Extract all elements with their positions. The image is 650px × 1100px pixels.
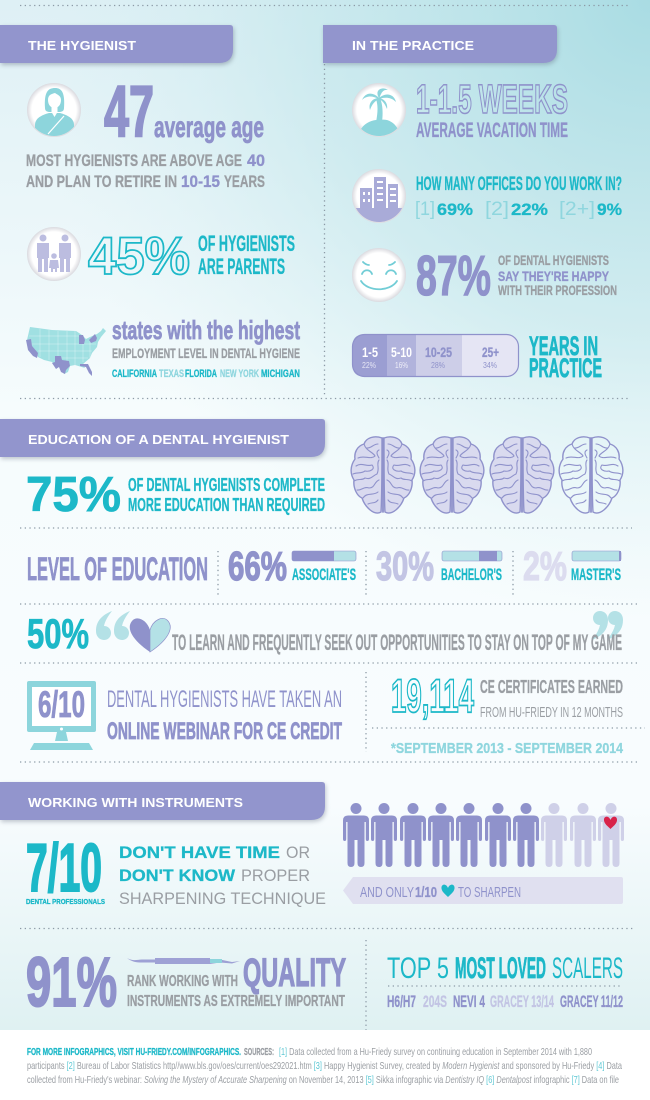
- panel: the hygienist: [0, 25, 300, 380]
- text: states with the highest employment: NEW YORK: [220, 368, 259, 380]
- chart: years in practice: 5-10: [391, 344, 412, 360]
- text: states with the highest employment: FLORIDA: [185, 368, 217, 380]
- stat: 91 percent: 91%: [26, 943, 117, 1021]
- stat: associate's 66 percent: ASSOCIATE'S: [292, 565, 356, 584]
- panel: education of a dental hygienist: [0, 419, 624, 757]
- stat: bachelor's 30 percent: [376, 543, 502, 589]
- stat: 45 percent are parents: ARE PARENTS: [198, 254, 285, 279]
- stat: 87 percent happy: [416, 244, 617, 308]
- icon: opening quotes: [96, 611, 130, 640]
- list: scalers: NEVI 4: [453, 992, 485, 1011]
- stat: 75 percent: [26, 468, 325, 522]
- text: retirement plans: 40: [247, 152, 265, 170]
- stat: CE certificates: 19,114: [391, 669, 474, 722]
- stat: 45 percent are parents: OF HYGIENISTS: [198, 231, 295, 256]
- callout: only 1/10 love to sharpen: AND ONLY: [360, 884, 414, 901]
- heading: education: [0, 419, 325, 457]
- stat: how many offices: [415, 174, 622, 220]
- list: scalers: [387, 992, 623, 1011]
- icon: hygienist portrait: [27, 83, 81, 140]
- quote: 50 percent love to learn: [27, 610, 623, 657]
- footer: sources: [27, 1046, 622, 1086]
- text: states with the highest employment: [112, 315, 300, 380]
- stat: vacation time: [416, 76, 568, 142]
- chart: years in practice: [352, 334, 518, 376]
- stat: bachelor's 30 percent: 30%: [376, 543, 434, 589]
- text: states with the highest employment: EMPLOYMENT LEVEL IN DENTAL HYGIENE: [112, 346, 300, 361]
- stat: associate's 66 percent: 66%: [228, 543, 287, 589]
- icon: computer monitor with 6/10: [27, 681, 96, 750]
- text: online webinar: [107, 686, 342, 745]
- stat: 7/10 dental professionals: [26, 830, 105, 906]
- stat: 7/10 dental professionals: DENTAL PROFESSIONALS: [26, 897, 105, 906]
- text: quality instruments: INSTRUMENTS AS EXTREMELY IMPORTANT: [127, 993, 345, 1010]
- text: online webinar: DENTAL HYGIENISTS HAVE TAKEN AN: [107, 686, 342, 713]
- callout: only 1/10 love to sharpen: 1/10: [415, 884, 437, 901]
- chart: years in practice: 28%: [431, 361, 445, 370]
- stat: how many offices: 22%: [511, 200, 548, 219]
- footer: sources: SOURCES:: [244, 1046, 274, 1058]
- icon: family: [27, 227, 81, 281]
- stat: 45 percent are parents: 45%: [88, 227, 190, 286]
- text: retirement plans: AND PLAN TO RETIRE IN: [26, 173, 177, 191]
- text: sharpening technique: DON'T KNOW: [119, 866, 236, 885]
- text: sharpening technique: SHARPENING TECHNIQUE: [119, 889, 326, 908]
- stat: master's 2 percent: 2%: [523, 543, 567, 589]
- stat: how many offices: 9%: [597, 200, 622, 219]
- text: sharpening technique: [119, 843, 326, 908]
- list: scalers: H6/H7: [387, 992, 416, 1011]
- chart: years in practice: 10-25: [425, 344, 452, 360]
- stat: how many offices: [1]: [415, 199, 435, 220]
- map: United States: [26, 327, 106, 376]
- stat: 47 average age: [104, 72, 264, 152]
- stat: 87 percent happy: SAY THEY'RE HAPPY: [498, 269, 609, 284]
- text: quality instruments: RANK WORKING WITH: [127, 973, 238, 990]
- chart: years in practice: 34%: [483, 361, 497, 370]
- heading: in the practice: [323, 25, 557, 63]
- stat: how many offices: [2+]: [559, 199, 595, 220]
- heading: top 5 most loved scalers: TOP 5: [387, 952, 449, 985]
- stat: how many offices: [2]: [485, 199, 509, 220]
- heading: in the practice: IN THE PRACTICE: [352, 38, 474, 53]
- list: scalers: 204S: [423, 992, 447, 1011]
- heading: working with instruments: WORKING WITH INSTRUMENTS: [28, 795, 243, 810]
- heading: top 5 most loved scalers: MOST LOVED: [455, 952, 546, 985]
- text: sharpening technique: OR: [286, 843, 310, 862]
- stat: 87 percent happy: 87%: [416, 244, 491, 308]
- text: states with the highest employment: states with the highest: [112, 315, 300, 345]
- text: sharpening technique: DON'T HAVE TIME: [119, 843, 280, 862]
- heading: the hygienist: THE HYGIENIST: [28, 38, 136, 53]
- text: states with the highest employment: CALIFORNIA: [112, 368, 157, 380]
- stat: bachelor's 30 percent: BACHELOR'S: [441, 565, 502, 584]
- chart: years in practice: 16%: [395, 361, 408, 370]
- footer: sources: collected from Hu-Friedy's webinar: Solving the Mystery of Accurate Sharpening on November 14, 2013 [5] Sikka infographic via Dentistry IQ [6] Dentalpost infographic [7] Data on file: [27, 1074, 619, 1086]
- chart: years in practice: 22%: [362, 361, 376, 370]
- stat: how many offices: 69%: [437, 200, 473, 219]
- icon: closing quotes: [592, 611, 623, 640]
- icon: computer monitor with 6/10: 6/10: [38, 684, 85, 725]
- chart: years in practice: 1-5: [362, 344, 378, 360]
- stat: CE certificates: [391, 669, 623, 722]
- text: level of education: LEVEL OF EDUCATION: [27, 551, 208, 587]
- heading: top 5 most loved scalers: [387, 952, 623, 985]
- quote: 50 percent love to learn: 50%: [27, 610, 89, 657]
- text: retirement plans: 10-15: [181, 173, 220, 191]
- text: online webinar: ONLINE WEBINAR FOR CE CREDIT: [107, 718, 342, 745]
- panel: working with instruments: [0, 782, 624, 1021]
- icon: dental scaler instrument: [127, 958, 240, 964]
- callout: only 1/10 love to sharpen: TO SHARPEN: [458, 884, 521, 901]
- stat: master's 2 percent: [523, 543, 621, 589]
- stat: 47 average age: average age: [154, 111, 264, 144]
- text: states with the highest employment: MICHIGAN: [261, 368, 300, 380]
- label: years in practice: [529, 331, 602, 383]
- list: scalers: GRACEY 13/14: [490, 992, 554, 1011]
- stat: 7/10 dental professionals: 7/10: [26, 830, 102, 906]
- icon: office buildings: [352, 169, 406, 224]
- footer: sources: FOR MORE INFOGRAPHICS, VISIT HU-FRIEDY.COM/INFOGRAPHICS.: [27, 1046, 241, 1058]
- stat: 75 percent: 75%: [26, 468, 121, 522]
- chart: years in practice: 25+: [482, 344, 499, 360]
- stat: associate's 66 percent: [228, 543, 356, 589]
- icon: palm island: [352, 83, 406, 137]
- heading: working with instruments: [0, 782, 325, 820]
- heading: the hygienist: [0, 25, 233, 63]
- stat: 75 percent: MORE EDUCATION THAN REQUIRED: [128, 495, 325, 515]
- icon: four brains, three filled: [351, 437, 623, 513]
- heading: education: EDUCATION OF A DENTAL HYGIENIST: [28, 432, 289, 447]
- text: retirement plans: YEARS: [224, 173, 265, 191]
- text: retirement plans: [26, 152, 265, 191]
- chart: ten people pictogram: [343, 803, 624, 867]
- text: retirement plans: MOST HYGIENISTS ARE ABOVE AGE: [26, 152, 242, 170]
- callout: only 1/10 love to sharpen: [343, 877, 623, 904]
- footer: sources: participants [2] Bureau of Labor Statistics http//www.bls.gov/oes/current/oes292021.htm [3] Happy Hygienist Survey, created by Modern Hygienist and sponsored by Hu-Friedy [4] Data: [27, 1060, 622, 1072]
- panel: in the practice: [323, 25, 622, 383]
- text: sharpening technique: PROPER: [241, 866, 310, 885]
- stat: 47 average age: 47: [104, 72, 154, 152]
- stat: 75 percent: OF DENTAL HYGIENISTS COMPLETE: [128, 475, 325, 495]
- icon: smiling face: [352, 248, 406, 302]
- text: states with the highest employment: TEXAS: [159, 368, 184, 380]
- text: quality instruments: [127, 951, 346, 1010]
- text: quality instruments: QUALITY: [243, 951, 346, 995]
- icon: half heart: [130, 618, 170, 652]
- stat: 45 percent are parents: [88, 227, 295, 286]
